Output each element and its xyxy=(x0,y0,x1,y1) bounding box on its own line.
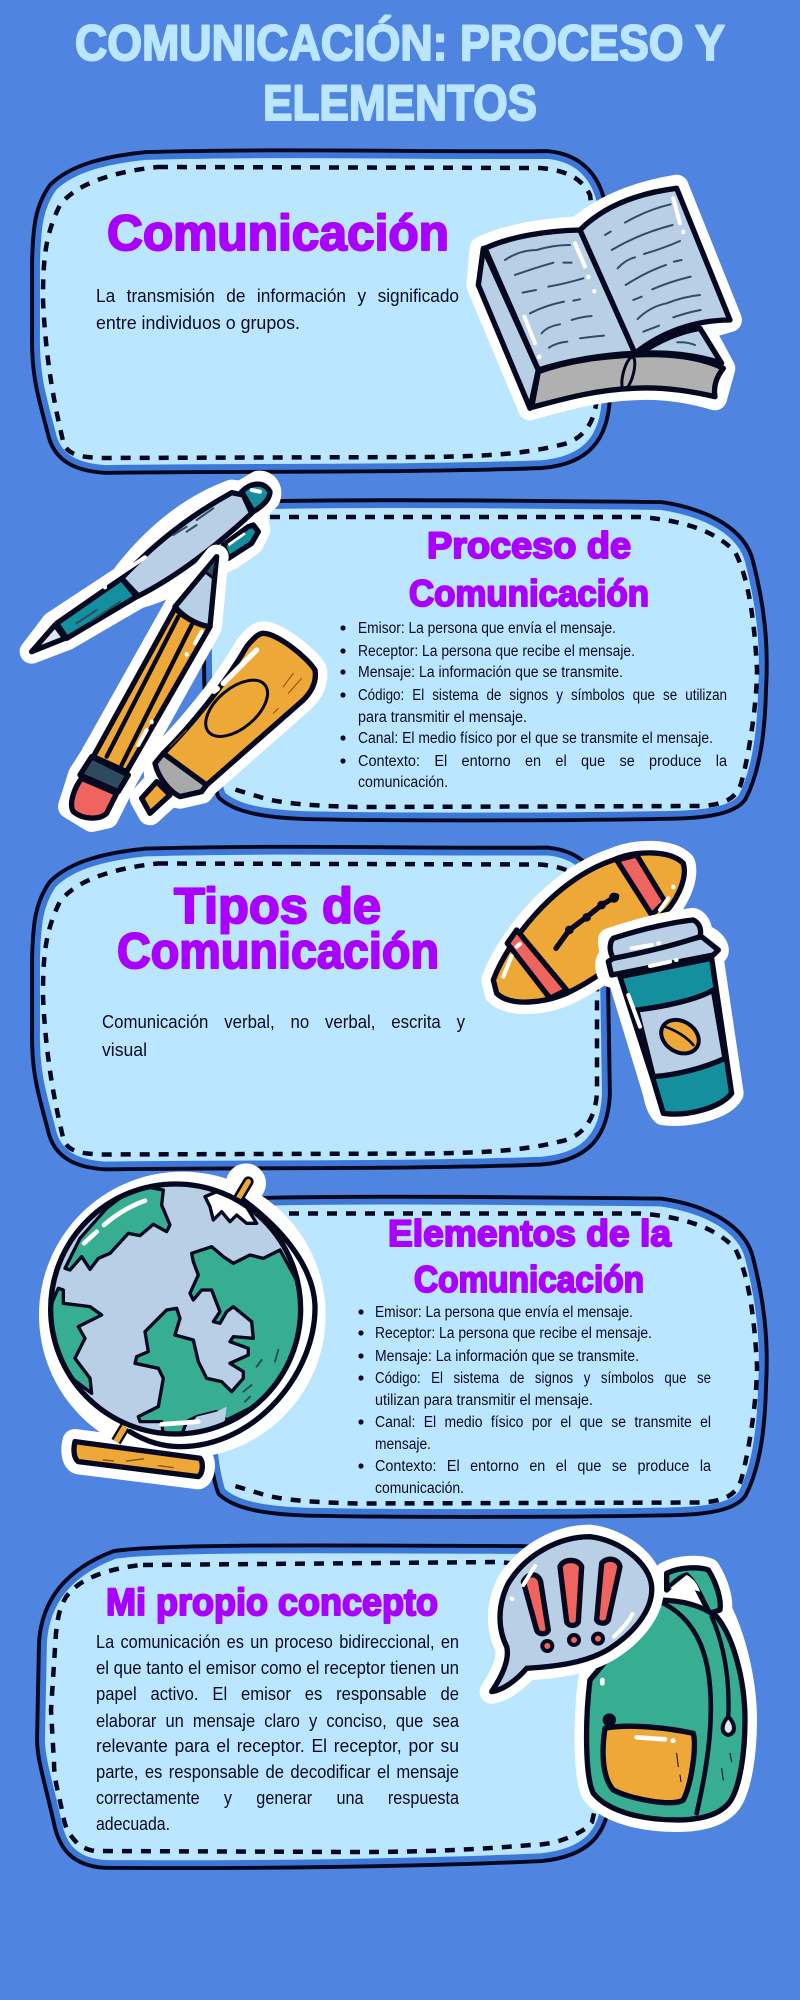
icon: marker xyxy=(142,633,315,813)
heading: proceso de comunicación xyxy=(409,525,649,614)
list: elementos: Mensaje: La información que se transmite. xyxy=(375,1348,639,1365)
panel: comunicación xyxy=(37,155,605,468)
icon: pencil xyxy=(70,557,217,820)
heading: proceso de comunicación: Comunicación xyxy=(409,573,649,614)
text: concepto: relevante para el receptor. El receptor, por su xyxy=(96,1736,459,1756)
list: elementos: Receptor: La persona que recibe el mensaje. xyxy=(375,1325,652,1342)
icon: football xyxy=(493,853,684,1002)
heading: elementos de la comunicación: Elementos de la xyxy=(388,1213,671,1254)
heading: comunicación: Comunicación xyxy=(107,205,449,261)
panel: tipos de comunicación xyxy=(37,852,605,1164)
icon: pen xyxy=(32,483,270,652)
icon: backpack xyxy=(587,1568,745,1820)
list: elementos: utilizan para transmitir el mensaje. xyxy=(375,1392,593,1409)
list: elementos: Emisor: La persona que envía el mensaje. xyxy=(375,1304,633,1321)
text: definición xyxy=(96,286,459,333)
heading: elementos de la comunicación: Comunicación xyxy=(414,1259,644,1300)
panel: elementos de la comunicación xyxy=(209,1202,762,1512)
list: elementos del proceso: Código: El sistema de signos y símbolos que se utilizan xyxy=(358,687,727,704)
text: tipos: visual xyxy=(102,1040,147,1060)
text: concepto: La comunicación es un proceso bidireccional, en xyxy=(96,1632,459,1652)
text: definición: entre individuos o grupos. xyxy=(96,313,300,333)
text: tipos: Comunicación verbal, no verbal, escrita y xyxy=(102,1012,465,1032)
heading: proceso de comunicación: Proceso de xyxy=(427,525,631,566)
title: ELEMENTOS xyxy=(263,75,537,131)
title: COMUNICACIÓN: PROCESO Y xyxy=(75,15,725,71)
text: definición: La transmisión de información y significado xyxy=(96,286,459,306)
heading: mi propio concepto: Mi propio concepto xyxy=(106,1582,438,1624)
heading: tipos de comunicación: Comunicación xyxy=(117,923,439,979)
text: concepto xyxy=(96,1632,460,1834)
heading: tipos de comunicación xyxy=(117,878,439,979)
icon: globe xyxy=(39,1163,326,1477)
backpack pocket xyxy=(603,1726,694,1803)
list: elementos del proceso: comunicación. xyxy=(358,774,448,791)
panel: proceso de comunicación xyxy=(209,505,762,816)
icon: open book xyxy=(478,187,730,408)
heading: elementos de la comunicación xyxy=(388,1213,671,1300)
list: elementos del proceso: Mensaje: La información que se transmite. xyxy=(358,664,623,681)
list: elementos del proceso: Contexto: El entorno en el que se produce la xyxy=(358,753,727,770)
text: concepto: elaborar un mensaje claro y conciso, que sea xyxy=(96,1711,460,1731)
list: elementos del proceso: Emisor: La persona que envía el mensaje. xyxy=(358,620,616,637)
text: concepto: adecuada. xyxy=(96,1814,170,1834)
text: concepto: papel activo. El emisor es responsable de xyxy=(96,1684,459,1704)
list: elementos: Código: El sistema de signos y símbolos que se xyxy=(375,1370,711,1387)
title xyxy=(75,15,725,131)
list: elementos: Canal: El medio físico por el que se transmite el xyxy=(375,1414,711,1431)
heading: tipos de comunicación: Tipos de xyxy=(174,878,381,934)
icon: coffee cup xyxy=(607,920,732,1114)
globe continents xyxy=(43,1185,307,1435)
list: elementos xyxy=(358,1304,711,1497)
list: elementos del proceso: Receptor: La persona que recibe el mensaje. xyxy=(358,643,635,660)
list: elementos del proceso: para transmitir el mensaje. xyxy=(358,709,527,726)
list: elementos: Contexto: El entorno en el que se produce la xyxy=(375,1458,711,1475)
panel: mi propio concepto xyxy=(42,1550,605,1863)
text: concepto: parte, es responsable de decodificar el mensaje xyxy=(96,1762,459,1782)
icon: speech bubble with exclamation marks xyxy=(492,1537,652,1692)
text: concepto: correctamente y generar una respuesta xyxy=(96,1788,460,1808)
list: elementos: comunicación. xyxy=(375,1480,464,1497)
text: tipos xyxy=(102,1012,465,1060)
list: elementos: mensaje. xyxy=(375,1436,431,1453)
globe stand xyxy=(74,1182,248,1477)
text: concepto: el que tanto el emisor como el receptor tienen un xyxy=(96,1658,459,1678)
list: elementos del proceso xyxy=(340,620,727,791)
list: elementos del proceso: Canal: El medio físico por el que se transmite el mensaje. xyxy=(358,730,713,747)
